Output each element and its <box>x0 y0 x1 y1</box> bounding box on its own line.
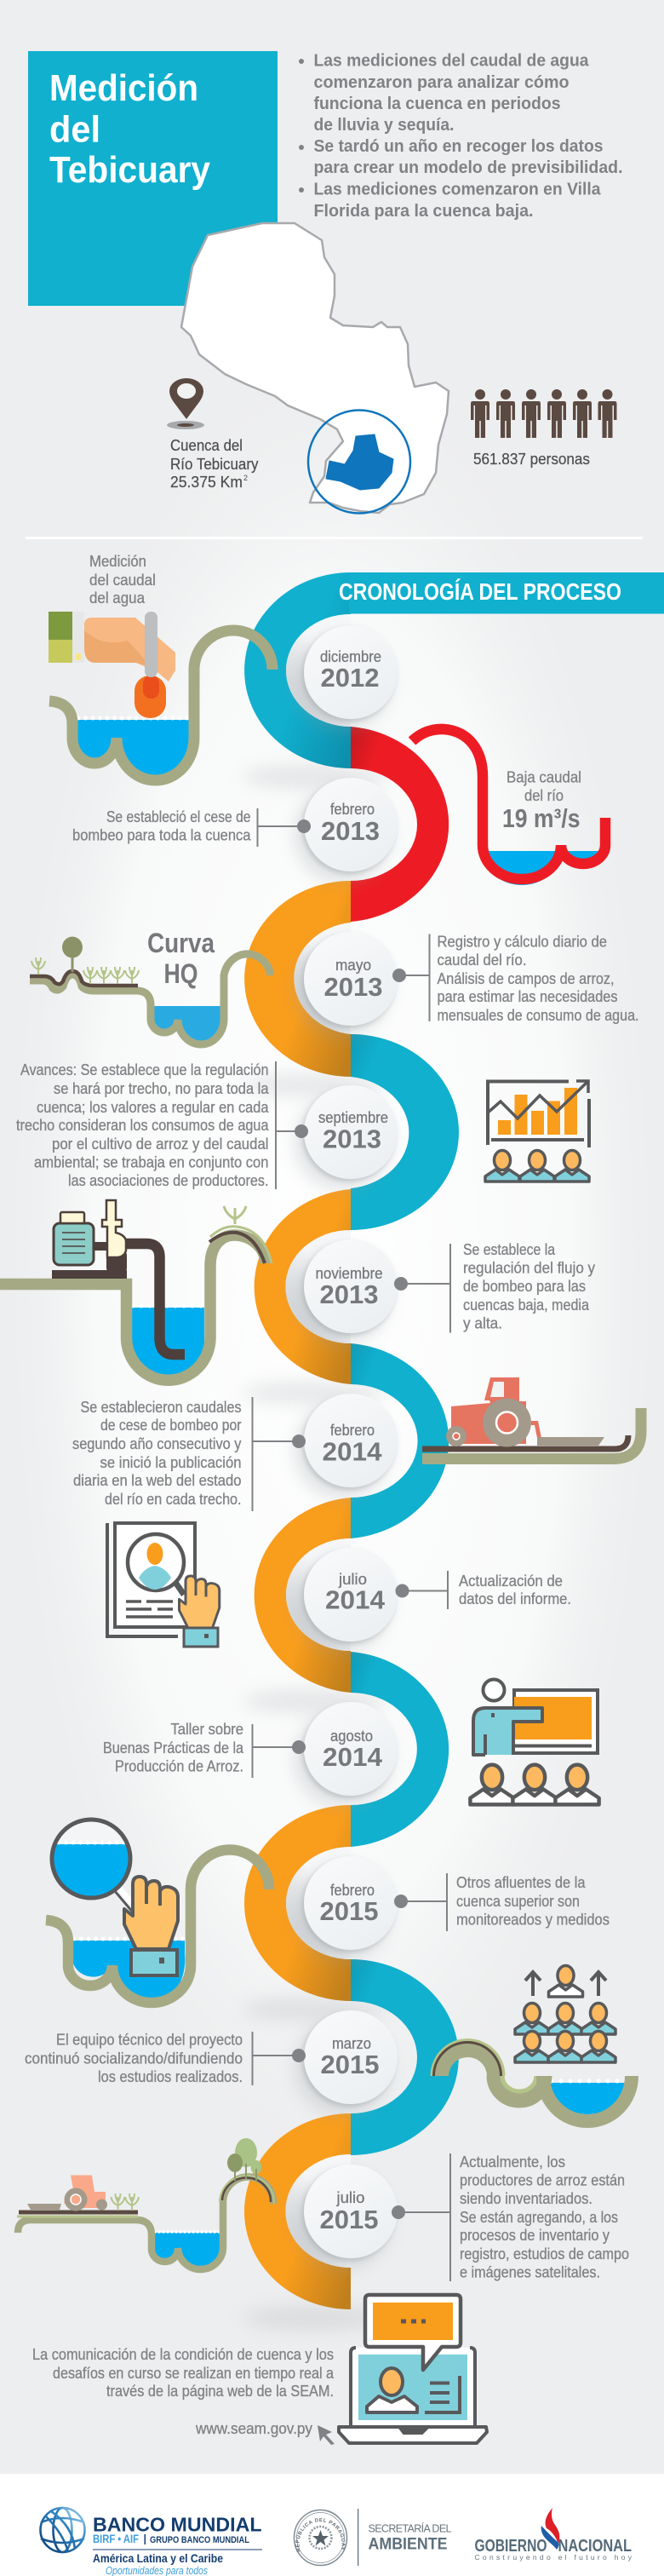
logo: national seal and Secretaría del Ambiente: REPÚBLICA DEL PARAGUAY <box>295 2518 346 2552</box>
note: julio 2015: siendo inventariados. <box>460 2190 592 2207</box>
location pin with basin area <box>167 378 259 491</box>
date disc: septiembre 2013 <box>294 1085 398 1191</box>
note: julio 2015: registro, estudios de campo <box>460 2245 629 2263</box>
intro bullet list: de lluvia y sequía. <box>313 116 455 135</box>
illustration: low river flow pipe: del río <box>524 787 564 804</box>
illustration: low river flow pipe: Baja caudal <box>507 768 581 785</box>
note: septiembre 2013 <box>16 1061 308 1189</box>
note: noviembre 2013: Se establece la <box>463 1241 556 1258</box>
note: noviembre 2013: y alta. <box>463 1315 502 1332</box>
date disc: febrero 2014: febrero <box>330 1422 375 1439</box>
note: julio 2015: Actualmente, los <box>460 2153 565 2171</box>
date disc: noviembre 2013: noviembre <box>315 1265 383 1282</box>
illustration: hand measuring water flow: del agua <box>89 589 146 607</box>
date disc: marzo 2015 <box>294 2010 398 2116</box>
note: noviembre 2013: cuencas baja, media <box>463 1297 590 1314</box>
date disc: julio 2014 <box>294 1548 398 1653</box>
note: noviembre 2013 <box>394 1241 595 1332</box>
note: noviembre 2013: regulación del flujo y <box>463 1259 595 1276</box>
illustration: river pipe at marzo 2015 <box>431 2038 632 2121</box>
note: agosto 2014: Taller sobre <box>170 1721 243 1738</box>
note: febrero 2014: diaria en la web del estado <box>73 1472 242 1489</box>
closing text: www.seam.gov.py <box>195 2420 312 2437</box>
note: febrero 2015 <box>394 1873 610 1931</box>
intro bullet list: comenzaron para analizar cómo <box>313 73 569 92</box>
note: febrero 2014: Se establecieron caudales <box>80 1399 242 1416</box>
date disc: diciembre 2012 <box>294 625 398 731</box>
note: mayo 2013: Análisis de campos de arroz, <box>438 970 615 987</box>
note: agosto 2014: Buenas Prácticas de la <box>103 1739 244 1757</box>
closing text: La comunicación de la condición de cuenca y los <box>32 2346 334 2363</box>
date disc: febrero 2013: febrero <box>330 801 375 818</box>
date disc: diciembre 2012: 2012 <box>320 663 380 693</box>
note: septiembre 2013: ambiental; se trabaja en conjunto con <box>34 1153 269 1170</box>
illustration: growth chart with audience <box>485 1081 589 1182</box>
date disc: noviembre 2013: 2013 <box>320 1279 378 1309</box>
note: julio 2015 <box>392 2153 629 2281</box>
timeline ribbon <box>244 572 664 2309</box>
date disc: febrero 2014: 2014 <box>322 1436 382 1467</box>
date disc: mayo 2013: mayo <box>335 957 371 974</box>
illustration: growing group of people <box>515 1966 615 2062</box>
date disc: agosto 2014: 2014 <box>323 1742 383 1772</box>
logo: national seal and Secretaría del Ambiente: AMBIENTE <box>368 2535 448 2554</box>
date disc: febrero 2013 <box>294 778 398 883</box>
note: mayo 2013: para estimar las necesidades <box>438 988 618 1005</box>
date disc: diciembre 2012: diciembre <box>320 648 381 665</box>
note: febrero 2013 <box>72 808 311 847</box>
note: febrero 2013: Se estableció el cese de <box>106 808 250 825</box>
title panel <box>28 51 278 306</box>
title panel: Tebicuary <box>49 149 210 191</box>
date disc: julio 2014: julio <box>338 1571 367 1588</box>
illustration: hand measuring water flow: del caudal <box>89 572 156 589</box>
logo: Gobierno Nacional: Construyendo el futuro hoy <box>475 2553 633 2562</box>
note: noviembre 2013: de bombeo para las <box>463 1278 586 1295</box>
date disc: febrero 2015: 2015 <box>320 1896 378 1926</box>
note: febrero 2014: se inició la publicación <box>100 1454 242 1471</box>
note: mayo 2013: caudal del río. <box>438 952 526 969</box>
note: septiembre 2013: trecho consideran los consumos de agua <box>16 1117 269 1134</box>
illustration: presenter and audience <box>470 1680 599 1804</box>
intro bullet list: funciona la cuenca en periodos <box>313 95 560 113</box>
note: mayo 2013 <box>392 934 638 1024</box>
note: mayo 2013: mensuales de consumo de agua. <box>438 1007 638 1024</box>
logo: Banco Mundial <box>41 2508 262 2576</box>
title panel: Medición <box>49 67 198 109</box>
note: septiembre 2013: se hará por trecho, no para toda la <box>54 1080 269 1097</box>
date disc: agosto 2014 <box>294 1702 398 1808</box>
location pin with basin area: Cuenca del <box>170 437 243 454</box>
note: febrero 2014: de cese de bombeo por <box>100 1417 242 1434</box>
note: febrero 2015: monitoreados y medidos <box>456 1912 610 1929</box>
population icons <box>471 389 616 468</box>
location pin with basin area: 25.375 Km <box>170 474 243 491</box>
date disc: marzo 2015: marzo <box>332 2035 371 2052</box>
date disc: septiembre 2013: septiembre <box>318 1109 388 1126</box>
note: julio 2015: Se están agregando, a los <box>460 2209 618 2226</box>
closing text <box>32 2346 335 2437</box>
note: septiembre 2013: cuenca; los valores a regular en cada <box>37 1099 269 1116</box>
note: julio 2015: e imágenes satelitales. <box>460 2264 600 2281</box>
date disc: julio 2015: 2015 <box>320 2205 378 2234</box>
note: febrero 2014 <box>72 1397 306 1511</box>
logo: Banco Mundial: GRUPO BANCO MUNDIAL <box>150 2535 249 2545</box>
intro bullet list <box>299 51 623 221</box>
date disc: febrero 2013: 2013 <box>321 816 380 846</box>
date disc: julio 2014: 2014 <box>325 1584 386 1615</box>
date disc: agosto 2014: agosto <box>330 1728 373 1745</box>
logo: national seal and Secretaría del Ambiente <box>293 2509 452 2566</box>
logo: Banco Mundial: América Latina y el Caribe <box>93 2551 223 2565</box>
date disc: marzo 2015: 2015 <box>320 2050 380 2079</box>
date disc: febrero 2014 <box>294 1394 398 1499</box>
note: febrero 2015: cuenca superior son <box>456 1893 580 1910</box>
note: marzo 2015: los estudios realizados. <box>98 2068 243 2085</box>
note: febrero 2015: Otros afluentes de la <box>456 1874 586 1891</box>
date disc: julio 2015 <box>294 2165 398 2270</box>
intro bullet list: para crear un modelo de previsibilidad. <box>313 158 623 177</box>
location pin with basin area: Río Tebicuary <box>170 456 259 473</box>
note: septiembre 2013: por el cultivo de arroz y del caudal <box>52 1136 269 1153</box>
note: julio 2014 <box>395 1571 571 1609</box>
note: marzo 2015 <box>25 2031 306 2085</box>
illustration: hand measuring water flow <box>49 553 272 780</box>
note: septiembre 2013: las asociaciones de productores. <box>68 1172 269 1189</box>
illustration: tractor on field <box>422 1377 641 1458</box>
logo: Gobierno Nacional: GOBIERNO <box>475 2537 547 2556</box>
intro bullet list: Se tardó un año en recoger los datos <box>313 137 603 156</box>
illustration: HQ curve: Curva <box>147 928 215 958</box>
illustration: hand measuring water flow: Medición <box>89 553 146 570</box>
illustration: water under magnifier <box>46 1820 269 2005</box>
illustration: low river flow pipe <box>412 729 605 885</box>
note: agosto 2014 <box>103 1721 306 1778</box>
date disc: septiembre 2013: 2013 <box>323 1124 381 1153</box>
note: marzo 2015: continuó socializando/difundiendo <box>25 2050 243 2067</box>
illustration: HQ curve <box>30 928 271 1044</box>
population icons: 561.837 personas <box>473 451 590 468</box>
location pin with basin area: 2 <box>243 474 248 482</box>
illustration: HQ curve: HQ <box>163 958 197 989</box>
date disc: julio 2015: julio <box>335 2189 364 2206</box>
note: agosto 2014: Producción de Arroz. <box>115 1758 243 1775</box>
note: febrero 2014: segundo año consecutivo y <box>72 1435 242 1452</box>
note: julio 2014: Actualización de <box>459 1573 563 1590</box>
note: septiembre 2013: Avances: Se establece que la regulación <box>20 1061 269 1078</box>
closing text: desafíos en curso se realizan en tiempo real a <box>53 2365 335 2382</box>
intro bullet list: Las mediciones comenzaron en Villa <box>313 181 601 199</box>
logo: Gobierno Nacional <box>475 2508 633 2562</box>
note: julio 2015: productores de arroz están <box>460 2172 625 2189</box>
illustration: document with magnifier <box>107 1523 220 1647</box>
note: marzo 2015: El equipo técnico del proyecto <box>56 2031 243 2048</box>
note: mayo 2013: Registro y cálculo diario de <box>438 934 607 951</box>
date disc: noviembre 2013 <box>294 1239 398 1345</box>
logo: Banco Mundial: BIRF • AIF <box>93 2532 139 2545</box>
illustration: low river flow pipe: 19 m³/s <box>502 803 581 833</box>
date disc: mayo 2013: 2013 <box>323 972 383 1002</box>
map of Paraguay <box>181 223 449 513</box>
note: febrero 2014: del río en cada trecho. <box>105 1491 242 1508</box>
icon: laptop with speech bubble <box>339 2295 487 2443</box>
note: julio 2014: datos del informe. <box>459 1590 571 1607</box>
date disc: mayo 2013 <box>294 932 398 1038</box>
date disc: febrero 2015 <box>294 1856 398 1962</box>
closing text: través de la página web de la SEAM. <box>106 2383 334 2400</box>
illustration: water pump and well <box>0 1200 272 1380</box>
intro bullet list: Florida para la cuenca baja. <box>313 202 533 221</box>
logo: Banco Mundial: BANCO MUNDIAL <box>93 2513 262 2535</box>
title panel: del <box>49 109 100 150</box>
intro bullet list: Las mediciones del caudal de agua <box>313 51 589 70</box>
logo: national seal and Secretaría del Ambiente: SECRETARÍA DEL <box>368 2521 452 2535</box>
illustration: tractor and trees at julio 2015 <box>17 2138 274 2272</box>
date disc: febrero 2015: febrero <box>330 1882 375 1899</box>
icon: mouse cursor <box>318 2425 335 2445</box>
logo: Gobierno Nacional: NACIONAL <box>558 2537 632 2556</box>
note: febrero 2013: bombeo para toda la cuenca <box>72 826 251 843</box>
note: julio 2015: procesos de inventario y <box>460 2227 610 2244</box>
